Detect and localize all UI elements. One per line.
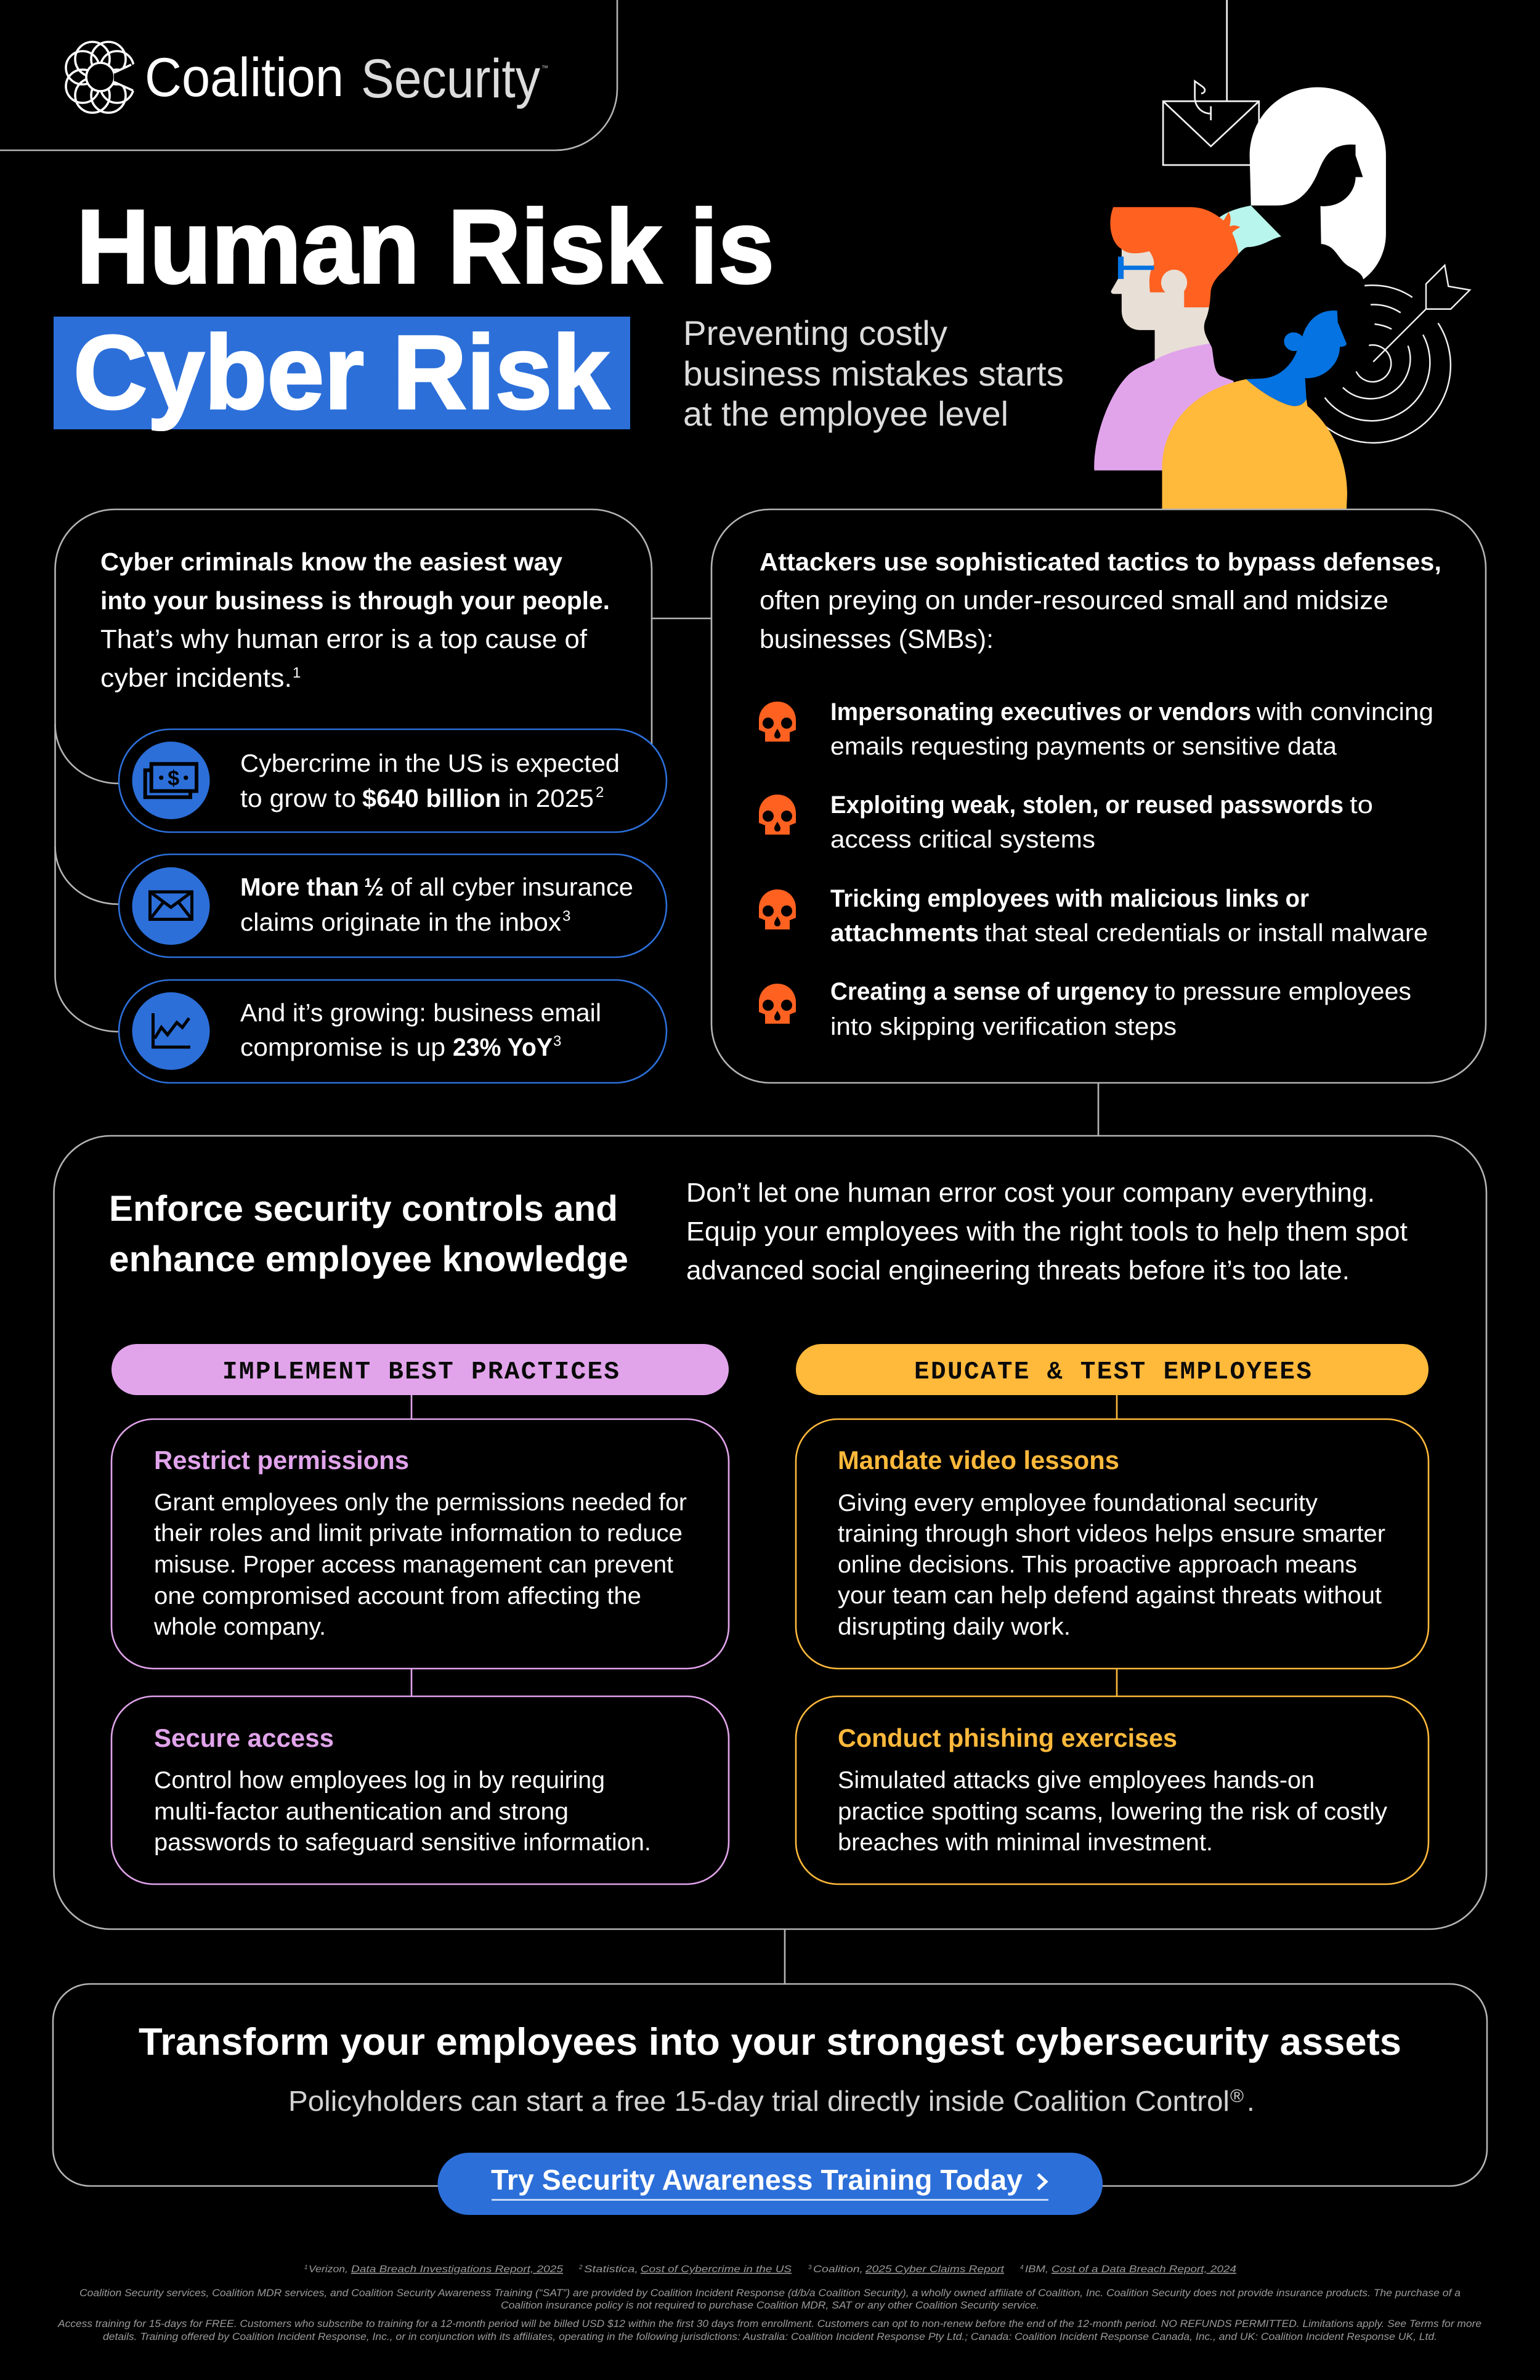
stat text: in 2025 [508, 784, 594, 812]
tactic: urgency [759, 978, 1411, 1040]
card: restrict permissions: their roles and limit private information to reduce [154, 1520, 683, 1547]
man face [1111, 247, 1217, 364]
icon: chevron [1038, 2174, 1046, 2189]
stat text [240, 749, 620, 812]
tactic: malicious links [759, 885, 1428, 947]
card: secure access: passwords to safeguard sensitive information. [154, 1829, 651, 1856]
icon: money [132, 742, 209, 819]
card: mandate video lessons: Mandate video lessons [838, 1446, 1119, 1475]
text block: intro: into your business is through your people. [100, 586, 610, 615]
man hair [1110, 207, 1240, 307]
button: try security awareness training: Try Security Awareness Training Today [491, 2164, 1023, 2196]
tactic: passwords [759, 791, 1373, 853]
white capsule background [1250, 87, 1386, 279]
text block: intro: cyber incidents. [100, 663, 292, 693]
footnotes: Statistica, [584, 2264, 638, 2275]
text block: attackers intro [760, 548, 1441, 654]
tactic: malicious links: Tricking employees with malicious links or [830, 885, 1309, 912]
text block: trial offer: ® [1230, 2086, 1244, 2107]
woman black hair silhouette [1204, 145, 1371, 384]
subtitle: at the employee level [683, 394, 1008, 433]
connector: controls to call to action [784, 1929, 785, 1984]
column: educate and test employees [796, 1344, 1429, 1884]
text block: enforce intro: advanced social engineering threats before it’s too late. [686, 1255, 1350, 1285]
stat pill: inbox claims [119, 854, 667, 957]
stat text: 23% YoY [453, 1033, 553, 1061]
title [54, 188, 774, 431]
panel: cyber criminals [55, 509, 667, 1083]
icon: target with arrow [1325, 265, 1470, 443]
glasses [1118, 257, 1154, 279]
legal disclaimer: Access training for 15-days for FREE. Customers who subscribe to training for a 12-month period will be billed USD $12 within the first 30 days from enrollment. Customers can opt to non-renew before the end of the 12-month period. NO REFUNDS PERMITTED. Limitations apply. See Terms for more [57, 2318, 1481, 2329]
footnotes: 4 [1020, 2264, 1024, 2271]
text block: intro: Cyber criminals know the easiest way [100, 548, 562, 576]
card: restrict permissions: misuse. Proper access management can prevent [154, 1552, 673, 1578]
column header: yellow [796, 1344, 1429, 1395]
tactic: passwords: access critical systems [830, 826, 1095, 853]
column: implement best practices [111, 1344, 729, 1884]
connector: tactics to controls [1098, 1083, 1099, 1136]
heading: transform: Transform your employees into your strongest cybersecurity assets [139, 2021, 1401, 2063]
card: mandate video lessons: online decisions. This proactive approach means [838, 1552, 1357, 1578]
logo wordmark [145, 46, 548, 109]
stat text: More than [240, 873, 359, 901]
tactic: impersonating: Impersonating executives or vendors [830, 698, 1251, 726]
stat text: Cybercrime in the US is expected [240, 749, 620, 777]
icon: envelope [132, 867, 209, 945]
man ear [1161, 270, 1187, 296]
panel: enforce security controls [54, 1136, 1486, 1929]
logo wordmark: Coalition [145, 46, 344, 108]
card: mandate video lessons: disrupting daily work. [838, 1614, 1071, 1640]
footnotes: 3 [808, 2264, 812, 2271]
stat text: $640 billion [362, 784, 501, 812]
connector: cards [652, 618, 711, 619]
text block: trial offer: . [1247, 2085, 1255, 2117]
footnotes: 2025 Cyber Claims Report [865, 2264, 1005, 2275]
card: restrict permissions: Grant employees only the permissions needed for [154, 1489, 687, 1516]
column header: pink: IMPLEMENT BEST PRACTICES [222, 1358, 619, 1386]
legal disclaimer: Coalition Security services, Coalition MDR services, and Coalition Security Awareness Training (“SAT”) are provided by Coalition Incident Response (d/b/a Coalition Security), a wholly owned affiliate of Coalition, Inc. Coalition Security does not provide insurance products. The purchase of a [79, 2287, 1461, 2299]
tactic: impersonating: emails requesting payments or sensitive data [830, 733, 1337, 760]
footnotes: 1 [304, 2264, 308, 2271]
icon: money: $ [168, 767, 179, 790]
text block: attackers intro: Attackers use sophisticated tactics to bypass defenses, [760, 548, 1441, 576]
text block: enforce intro: Don’t let one human error cost your company everything. [686, 1178, 1375, 1208]
card: secure access: Secure access [154, 1723, 334, 1752]
card: restrict permissions: Restrict permissions [154, 1446, 409, 1475]
footnotes: 2 [578, 2264, 583, 2271]
woman shirt [1162, 379, 1347, 509]
panel: attackers tactics [711, 509, 1486, 1083]
tactic: passwords: to [1350, 791, 1373, 819]
illustration: employees with phishing email and target [1094, 0, 1470, 509]
icon: growth chart [132, 992, 209, 1070]
teal hair [1220, 206, 1281, 256]
stat pill: cybercrime [119, 729, 667, 832]
text block: trial offer: Policyholders can start a free 15-day trial directly inside Coalition Control [288, 2085, 1230, 2117]
text block: enforce intro [686, 1178, 1408, 1285]
heading: enforce: Enforce security controls and [109, 1189, 618, 1229]
column header: pink [111, 1344, 729, 1395]
heading: enforce [109, 1189, 628, 1279]
icon: Coalition logo mark [66, 42, 134, 113]
card: conduct phishing exercises: Conduct phishing exercises [838, 1723, 1177, 1752]
text block: enforce intro: Equip your employees with the right tools to help them spot [686, 1216, 1408, 1247]
stat text: of all cyber insurance [391, 873, 633, 901]
stat text: ½ [364, 873, 384, 901]
footnotes: Verizon, [309, 2264, 348, 2275]
tactic: passwords: Exploiting weak, stolen, or reused passwords [830, 791, 1343, 819]
stat text: to grow to [240, 784, 356, 812]
card: secure access [111, 1696, 729, 1884]
logo wordmark: ™ [541, 65, 548, 72]
tactic: malicious links: attachments [830, 920, 979, 947]
stat pill: email compromise [119, 980, 667, 1083]
stat text: 3 [562, 908, 570, 925]
stat text: 2 [596, 784, 604, 801]
tactic: urgency: Creating a sense of urgency [830, 978, 1149, 1005]
card: mandate video lessons: Giving every employee foundational security [838, 1490, 1318, 1516]
text block: attackers intro: often preying on under-resourced small and midsize [760, 586, 1388, 615]
tactic: impersonating: with convincing [1256, 698, 1433, 726]
stat text [240, 873, 633, 936]
card: restrict permissions: one compromised account from affecting the [154, 1583, 641, 1609]
stat text: compromise is up [240, 1033, 445, 1061]
footnotes: Cost of Cybercrime in the US [641, 2264, 792, 2275]
column header: yellow: EDUCATE & TEST EMPLOYEES [914, 1358, 1311, 1386]
footnotes: Cost of a Data Breach Report, 2024 [1052, 2264, 1236, 2275]
footnotes: Data Breach Investigations Report, 2025 [351, 2264, 563, 2275]
man shirt [1094, 343, 1234, 471]
title: Human Risk is [76, 188, 774, 306]
stat text: claims originate in the inbox [240, 908, 562, 936]
tactic: impersonating [759, 698, 1433, 760]
highlight box: Cyber Risk: Cyber Risk [73, 314, 609, 431]
tactic: urgency: to pressure employees [1154, 978, 1411, 1005]
stat text [240, 998, 601, 1061]
tactic: malicious links: that steal credentials or install malware [984, 920, 1428, 947]
text block: intro: 1 [293, 665, 301, 681]
card: conduct phishing exercises: Simulated attacks give employees hands-on [838, 1767, 1315, 1794]
card: restrict permissions [111, 1419, 729, 1669]
subtitle: Preventing costly [683, 314, 947, 352]
icon: phishing envelope with hook [1163, 0, 1259, 165]
card: secure access: Control how employees log in by requiring [154, 1767, 605, 1794]
stat text: And it’s growing: business email [240, 998, 601, 1027]
footnotes [304, 2264, 1236, 2275]
card: restrict permissions: whole company. [153, 1614, 326, 1640]
card: mandate video lessons: your team can help defend against threats without [838, 1582, 1382, 1609]
legal disclaimer: details. Training offered by Coalition Incident Response, Inc., or in conjunction with its affiliates, operating in the following jurisdictions: Australia: Coalition Incident Response Pty Ltd.; Canada: Coalition Incident Response Canada, Inc., and UK: Coalition Incident Response UK, Ltd. [103, 2331, 1437, 2342]
legal disclaimer: Coalition insurance policy is not required to purchase Coalition MDR, SAT or any other Coalition Security service. [501, 2299, 1039, 2311]
card: conduct phishing exercises [796, 1696, 1429, 1884]
footnotes: Coalition, [813, 2264, 863, 2275]
logo wordmark: Security [361, 47, 540, 109]
subtitle [683, 314, 1064, 433]
heading: enforce: enhance employee knowledge [109, 1239, 628, 1279]
card: conduct phishing exercises: breaches with minimal investment. [838, 1829, 1213, 1856]
card: mandate video lessons: training through short videos helps ensure smarter [838, 1521, 1385, 1547]
card: conduct phishing exercises: practice spotting scams, lowering the risk of costly [838, 1799, 1388, 1825]
text block: intro: That’s why human error is a top cause of [100, 625, 588, 654]
stat text: 3 [553, 1033, 561, 1050]
footnotes: IBM, [1025, 2264, 1048, 2275]
card: secure access: multi-factor authentication and strong [154, 1799, 569, 1825]
logo panel [0, 0, 617, 150]
card: mandate video lessons [796, 1419, 1429, 1669]
woman face [1246, 310, 1347, 406]
panel: call to action [53, 1984, 1487, 2215]
legal disclaimer [57, 2287, 1481, 2342]
text block: attackers intro: businesses (SMBs): [760, 625, 994, 654]
subtitle: business mistakes starts [683, 354, 1064, 393]
tactic: urgency: into skipping verification steps [830, 1013, 1177, 1040]
text block: intro [100, 548, 610, 693]
button: try security awareness training [437, 2153, 1103, 2215]
